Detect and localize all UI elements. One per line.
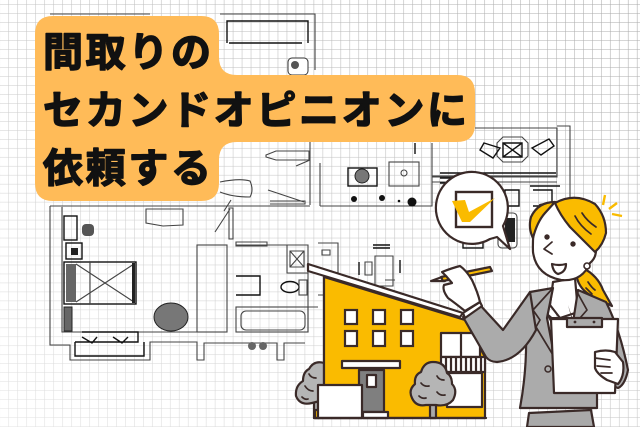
closet	[197, 245, 227, 332]
canopy	[342, 361, 400, 368]
jacket lapels	[533, 288, 590, 355]
garden wall	[318, 385, 362, 418]
illustration: businesswoman	[431, 195, 628, 427]
upper sink	[288, 58, 308, 75]
windows	[345, 310, 413, 346]
clipboard	[551, 318, 618, 393]
upper wardrobe	[227, 21, 308, 43]
orange title panel	[35, 16, 475, 201]
house body	[315, 277, 485, 418]
right hair	[555, 198, 606, 252]
bedroom door	[215, 208, 233, 239]
face	[533, 202, 596, 280]
outer walls	[50, 14, 570, 360]
illustration: house	[296, 264, 486, 418]
dining table	[359, 245, 400, 286]
bed	[64, 262, 136, 304]
earring	[584, 263, 590, 269]
check mark	[452, 198, 495, 222]
hand on clipboard	[595, 350, 623, 384]
left tree	[296, 362, 324, 418]
balcony windows	[441, 333, 485, 372]
cuff	[463, 302, 482, 318]
pen	[431, 267, 492, 281]
hair streaks	[575, 213, 596, 234]
small room fixtures	[308, 243, 338, 307]
ponytail streaks	[586, 282, 595, 294]
round rug	[154, 303, 188, 331]
skirt	[527, 410, 594, 427]
steps	[363, 412, 388, 418]
washroom	[236, 242, 308, 332]
terrace bench	[440, 173, 556, 183]
bedroom desk and chair	[64, 216, 94, 259]
plant stand	[463, 230, 484, 248]
hand holding pen	[442, 266, 480, 311]
jacket	[520, 288, 628, 408]
jacket sleeve	[463, 292, 536, 362]
speech bubble with check mark	[436, 172, 510, 249]
balcony fold doors and AC units	[75, 332, 267, 356]
title line 3: 依頼する	[43, 147, 211, 191]
title line 1: 間取りの	[43, 31, 211, 75]
blouse	[544, 305, 572, 325]
sparkle lines	[603, 195, 622, 216]
terrace table and chairs	[480, 137, 554, 162]
lounge chair	[498, 213, 517, 248]
neck	[550, 278, 578, 318]
kitchen	[348, 143, 419, 206]
bedside shelf	[64, 307, 72, 331]
floor plan drawing	[50, 14, 570, 360]
title text	[43, 31, 467, 191]
shelves	[505, 186, 560, 206]
roof	[308, 264, 463, 317]
left hair	[530, 202, 555, 238]
finger lines	[595, 358, 612, 373]
check box	[456, 192, 492, 227]
right tree	[411, 362, 455, 418]
jacket button	[545, 366, 551, 372]
ponytail	[577, 268, 612, 306]
ground line	[314, 417, 486, 419]
wall desk	[146, 209, 183, 226]
mouth	[552, 264, 566, 274]
garage opening	[447, 373, 482, 407]
eyes	[544, 234, 576, 247]
title line 2: セカンドオピニオンに	[43, 89, 467, 133]
door	[359, 370, 384, 412]
nose	[544, 242, 552, 254]
bath sink and door	[220, 151, 310, 211]
